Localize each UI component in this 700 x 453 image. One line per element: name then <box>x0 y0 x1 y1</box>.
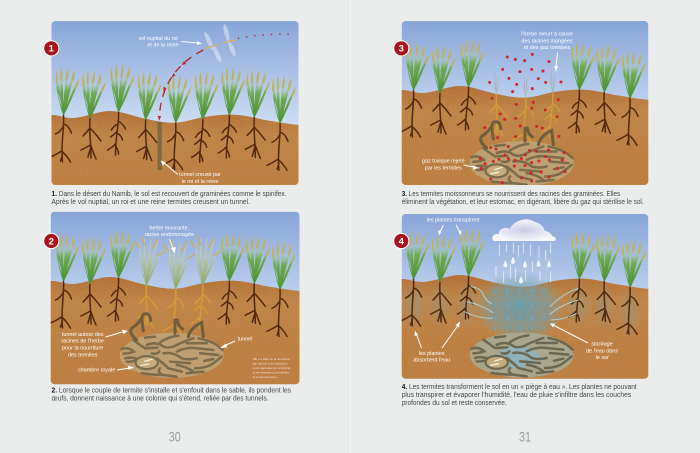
label: nuptial flight <box>138 36 202 49</box>
capillary water lines <box>465 287 578 320</box>
caption 2: œufs, donnent naissance à une colonie qui s'étend, reliée par des tunnels. <box>52 396 269 403</box>
panel 1: nuptial flight <box>52 21 298 185</box>
termite king and queen with wings <box>203 24 237 63</box>
badge 3: 3 <box>399 44 404 55</box>
caption 1 <box>52 191 287 206</box>
termite mound <box>470 332 574 378</box>
label: plants transpire <box>427 218 480 236</box>
scale note: et les insectes pour faciliter <box>253 370 289 374</box>
rain <box>496 242 551 283</box>
caption 1: Après le vol nuptial, un roi et une reine termites creusent un tunnel. <box>52 199 250 206</box>
label: root tunnels: des termites <box>68 352 98 358</box>
label: toxic gas: par les termites <box>425 166 462 172</box>
badge 4: 4 <box>399 236 405 247</box>
label: tunnel <box>220 337 252 348</box>
badge 4 <box>394 233 409 249</box>
badge 2 <box>44 233 59 249</box>
flight path <box>158 34 296 121</box>
caption 4: 4. Les termites transforment le sol en un « piège à eau ». Les plantes ne pouvant <box>402 384 637 391</box>
label: tunnel <box>160 160 221 185</box>
label: dying grass: herbe mourante, <box>150 225 190 231</box>
badge 3 <box>394 41 409 56</box>
label: grass dies <box>521 32 573 72</box>
label: plants absorb: les plantes <box>419 351 445 357</box>
panel 2: colony <box>50 212 300 384</box>
label: water storage <box>550 324 618 361</box>
badge 1: 1 <box>49 44 55 55</box>
toxic gas dots <box>479 53 566 184</box>
label: water storage: de l'eau dans <box>586 348 618 354</box>
label: plants transpire: les plantes transpirent <box>427 218 480 224</box>
cloud <box>492 219 556 241</box>
label: plants absorb <box>413 322 460 364</box>
badge 1 <box>44 41 59 56</box>
label: dying grass: racine endommagée <box>145 232 194 238</box>
caption 3: 3. Les termites moissonneurs se nourrissent des racines des graminées. Elles <box>402 191 621 198</box>
infiltration arrows <box>494 290 545 331</box>
stored water zone <box>476 274 564 336</box>
page number 30: 30 <box>169 429 181 445</box>
caption 2 <box>52 388 292 403</box>
label: dying grass <box>145 225 194 254</box>
label: toxic gas <box>422 158 479 172</box>
label: root tunnels: pour la nourriture <box>62 346 103 352</box>
caption 4: plus transpirer et évaporer l'humidité, l'eau de pluie s'infiltre dans les couches <box>402 392 632 399</box>
label: toxic gas: gaz toxique rejeté <box>422 158 465 164</box>
label: royal chamber <box>78 366 134 374</box>
label: root tunnels: racines de l'herbe <box>62 339 104 345</box>
label: royal chamber: chambre royale <box>78 368 115 374</box>
panel 3: toxic gas <box>402 21 648 185</box>
label: plants absorb: absorbent l'eau <box>413 358 450 364</box>
page number 31: 31 <box>519 429 531 445</box>
label: root tunnels <box>62 330 128 358</box>
label: tunnel: le roi et la reine <box>182 179 218 185</box>
scale note: a été agrandie par simplicité <box>253 366 291 370</box>
label: grass dies: et des gaz toxiques <box>524 45 571 51</box>
caption 3: éliminent la végétation, et leur estomac, en digérant, libère du gaz qui stérilise le sol. <box>402 199 644 206</box>
tunnel dug by the royal pair <box>158 122 162 170</box>
scale note: par rapport à la végétation <box>253 362 288 366</box>
panel 4: water trap <box>402 214 648 379</box>
scale note: la compréhension. <box>253 375 277 379</box>
label: root tunnels: tunnel autour des <box>62 332 104 338</box>
caption 2: 2. Lorsque le couple de termite s'installe et s'enfouit dans le sable, ils pondent les <box>52 388 292 395</box>
label: water storage: stockage <box>591 342 613 348</box>
caption 4 <box>402 384 637 407</box>
caption 4: profondes du sol et reste conservée. <box>402 400 507 407</box>
label: grass dies: l'herbe meurt à cause <box>521 32 573 38</box>
scale note <box>253 357 291 379</box>
label: nuptial flight: et de la reine <box>147 43 179 49</box>
label: grass dies: des racines mangées <box>521 38 573 44</box>
wet soil around roots <box>403 284 640 332</box>
caption 3 <box>402 191 644 206</box>
label: tunnel: tunnel <box>238 337 252 343</box>
scale note: NB. La taille de la termitière <box>253 357 290 361</box>
badge 2: 2 <box>49 236 54 247</box>
label: nuptial flight: vol nuptial du roi <box>138 36 178 42</box>
label: tunnel: tunnel creusé par <box>179 172 221 178</box>
caption 1: 1. Dans le désert du Namib, le sol est recouvert de graminées comme le spinifex. <box>52 191 287 198</box>
termite mound <box>470 122 574 186</box>
termite mound <box>120 314 224 378</box>
label: water storage: le sol <box>596 355 609 361</box>
